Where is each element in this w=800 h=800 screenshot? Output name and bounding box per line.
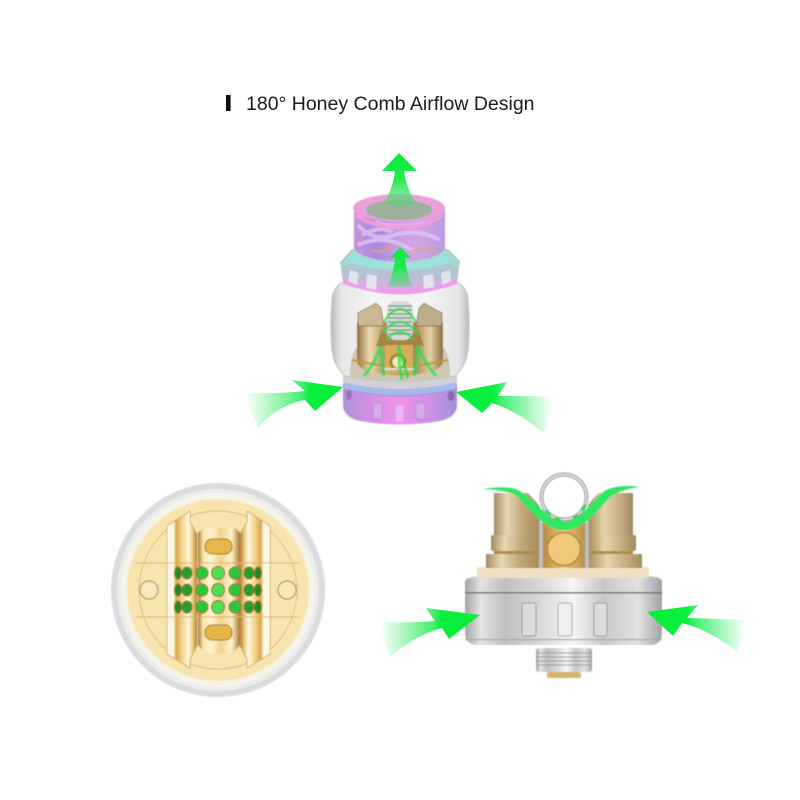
glass tube — [331, 282, 469, 381]
curved airflow band — [483, 486, 640, 530]
cream collar — [477, 567, 649, 578]
arrow: air in left of tank — [243, 380, 343, 427]
post circle left — [140, 581, 158, 599]
illustration: deck side view — [465, 474, 662, 678]
oval screw bottom — [205, 625, 232, 640]
title bullet bar — [226, 95, 231, 111]
arrow: airflow out top — [382, 153, 417, 206]
center block — [539, 522, 589, 568]
side rails — [167, 511, 270, 668]
white gap above airflow — [520, 486, 606, 524]
connector thread — [536, 648, 592, 678]
illustration: top-down honeycomb deck — [111, 483, 325, 697]
coil deck — [350, 301, 450, 381]
arrow: air in left of deck — [378, 608, 480, 657]
outer ring — [111, 483, 325, 697]
top cap — [340, 245, 460, 294]
right post — [588, 493, 642, 568]
post circle right — [278, 581, 296, 599]
title — [226, 93, 535, 115]
tank base — [343, 372, 457, 424]
oval screw top — [205, 539, 232, 554]
gold plate — [127, 499, 309, 681]
drip tip — [353, 194, 445, 262]
title text: 180° Honey Comb Airflow Design — [246, 93, 535, 115]
honeycomb holes — [174, 566, 262, 614]
center cylinder — [198, 528, 240, 654]
horizontal deck lines — [136, 563, 300, 617]
wire loop — [542, 474, 586, 521]
illustration: assembled tank — [331, 194, 469, 424]
arrow: air in right of tank — [456, 382, 555, 433]
left post — [486, 493, 540, 568]
arrow: airflow up through chimney — [388, 247, 412, 287]
steel base — [465, 576, 662, 645]
arrow: air in right of deck — [647, 605, 747, 652]
